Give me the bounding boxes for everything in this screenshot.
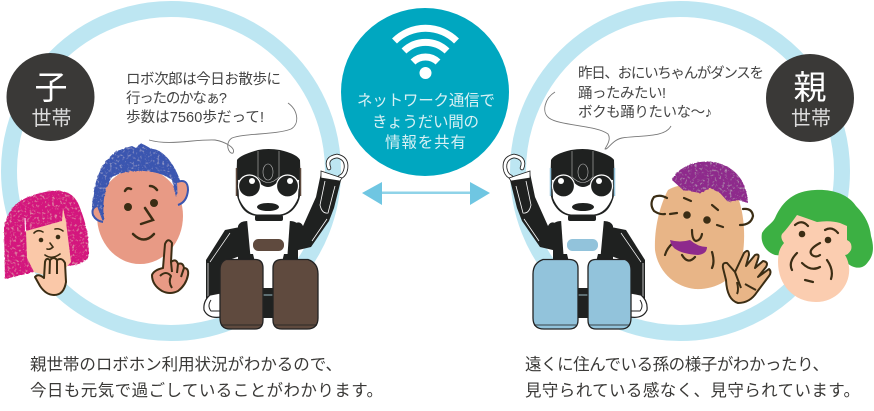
network circle (341, 8, 509, 176)
badge: parent household: 世帯 (791, 107, 831, 130)
ring: child household (9, 9, 333, 333)
person: girl with pink hair (4, 191, 89, 295)
girl's hand (35, 258, 66, 295)
speech bubble: parent side (545, 65, 767, 149)
network text: ネットワーク通信で (357, 92, 495, 110)
speech bubble: parent side: 踊ったみたい! (578, 85, 666, 102)
speech bubble: parent side: 昨日、おにいちゃんがダンスを (578, 65, 764, 82)
caption: parent household: 見守られている感なく、見守られています。 (525, 381, 860, 400)
double arrow (362, 182, 490, 205)
man's hand (152, 240, 188, 293)
badge: parent household: 親 (794, 69, 826, 106)
caption: parent household: 遠くに住んでいる孫の様子がわかったり、 (525, 355, 829, 374)
old man's hand (723, 251, 770, 303)
badge: child household: 子 (34, 69, 68, 106)
badge: parent household (766, 54, 854, 142)
caption: child household: 今日も元気で過ごしていることがわかります。 (30, 381, 383, 400)
speech bubble: child side (126, 71, 297, 153)
network text: 情報を共有 (385, 134, 466, 152)
speech bubble: child side: ロボ次郎は今日お散歩に (126, 71, 281, 88)
person: old man with purple hair (652, 162, 770, 303)
blue hair (92, 143, 181, 222)
speech bubble: child side: 歩数は7560歩だって! (126, 109, 264, 126)
badge: child household: 世帯 (32, 107, 72, 130)
badge: child household (6, 53, 94, 141)
person: man with blue hair (92, 143, 188, 293)
caption: child household: 親世帯のロボホン利用状況がわかるので、 (30, 355, 342, 374)
robot: parent household, blue (505, 149, 647, 329)
mustache (670, 240, 707, 255)
icon: wifi (394, 28, 456, 76)
speech bubble: child side: 行ったのかなぁ? (126, 90, 227, 107)
purple hair (672, 162, 748, 203)
robot: child household, brown (204, 149, 346, 329)
person: old woman with green hair (762, 190, 873, 302)
speech bubble: parent side: ボクも踊りたいな〜♪ (578, 104, 712, 121)
ring: parent household (518, 9, 842, 333)
network text: きょうだい間の (372, 113, 479, 131)
